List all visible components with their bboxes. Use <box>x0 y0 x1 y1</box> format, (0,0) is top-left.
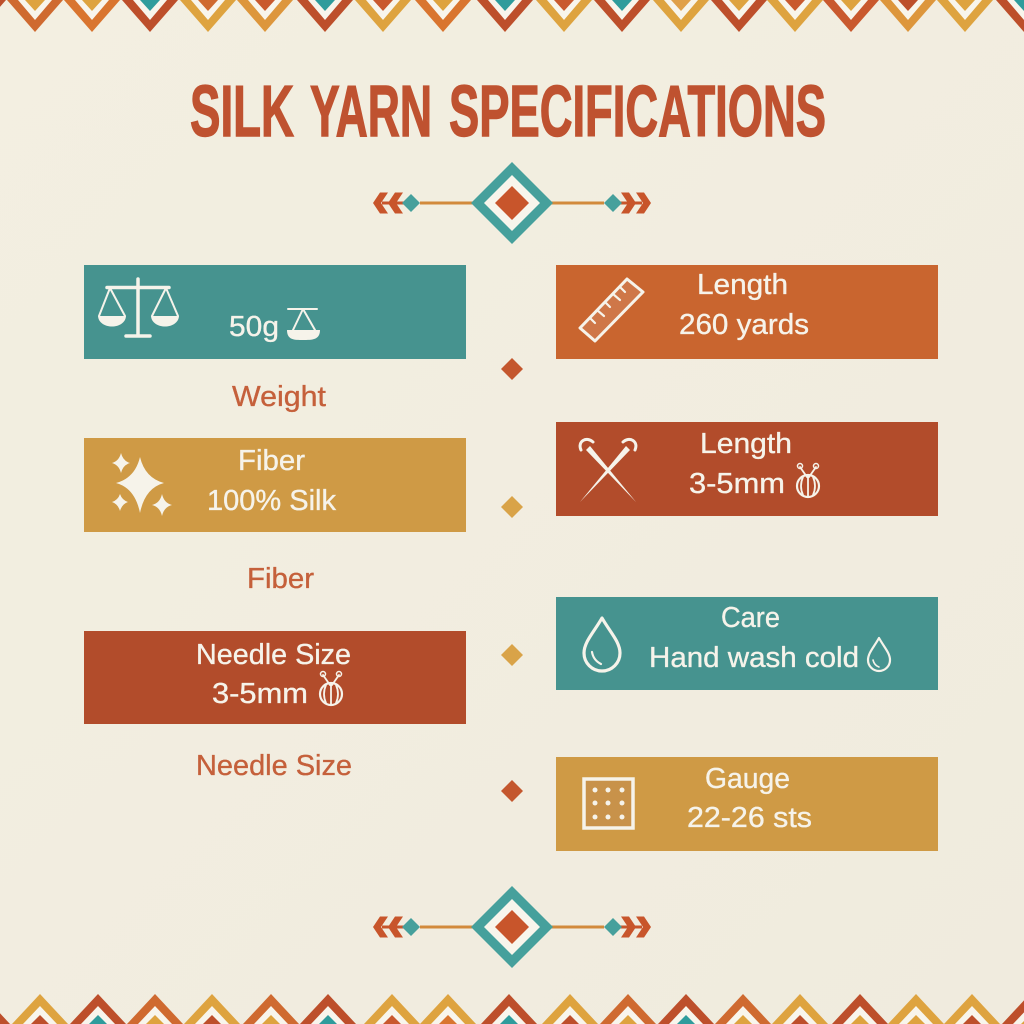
value: fiber <box>207 445 336 517</box>
bottom diamond arrow divider <box>373 886 651 968</box>
icon: small water drop <box>868 638 890 671</box>
value: gauge: 22-26 sts <box>687 802 812 834</box>
value: care <box>649 602 859 674</box>
value: gauge: Gauge <box>705 763 790 795</box>
value: length: 260 yards <box>679 309 809 341</box>
value: care: Hand wash cold <box>649 642 859 674</box>
panel: length <box>556 265 938 359</box>
top zigzag border <box>0 0 1024 32</box>
value: needle size: 3-5mm <box>212 678 308 710</box>
label: needle size: Needle Size <box>196 750 352 782</box>
value: needle length: Length <box>700 428 792 460</box>
value: length: Length <box>697 269 788 301</box>
label: fiber: Fiber <box>247 563 314 595</box>
value: fiber: Fiber <box>238 445 305 477</box>
value: fiber: 100% Silk <box>207 485 336 517</box>
panel: needles <box>556 422 938 516</box>
icon: yarn ball <box>320 672 342 705</box>
value: needle size: Needle Size <box>196 639 351 671</box>
value: length <box>679 269 809 341</box>
icon: sparkles <box>112 453 172 516</box>
title: YARN <box>310 72 432 152</box>
icon: small scale pan <box>287 309 320 340</box>
panel: weight <box>84 265 466 359</box>
bottom zigzag border <box>0 994 1024 1024</box>
icon: yarn ball <box>797 464 819 497</box>
icon: balance scale <box>98 279 179 336</box>
icon: ruler <box>580 279 643 341</box>
title: SILK <box>190 72 294 152</box>
icon: gauge swatch <box>584 779 633 828</box>
icon: water drop <box>584 618 620 671</box>
value: needle size <box>196 639 351 710</box>
panel: gauge <box>556 757 938 851</box>
panel: care <box>556 597 938 690</box>
icon: crossed needles <box>580 439 636 502</box>
panel: needle size <box>84 631 466 724</box>
title <box>190 72 826 152</box>
top diamond arrow divider <box>373 162 651 244</box>
panel: fiber <box>84 438 466 532</box>
label: weight: Weight <box>232 381 326 413</box>
value: 50g: 50g <box>229 311 279 343</box>
value: care: Care <box>721 602 780 634</box>
value: needle length: 3-5mm <box>689 468 785 500</box>
value: gauge <box>687 763 812 834</box>
value: needle length <box>689 428 792 500</box>
center diamond markers <box>501 358 523 802</box>
